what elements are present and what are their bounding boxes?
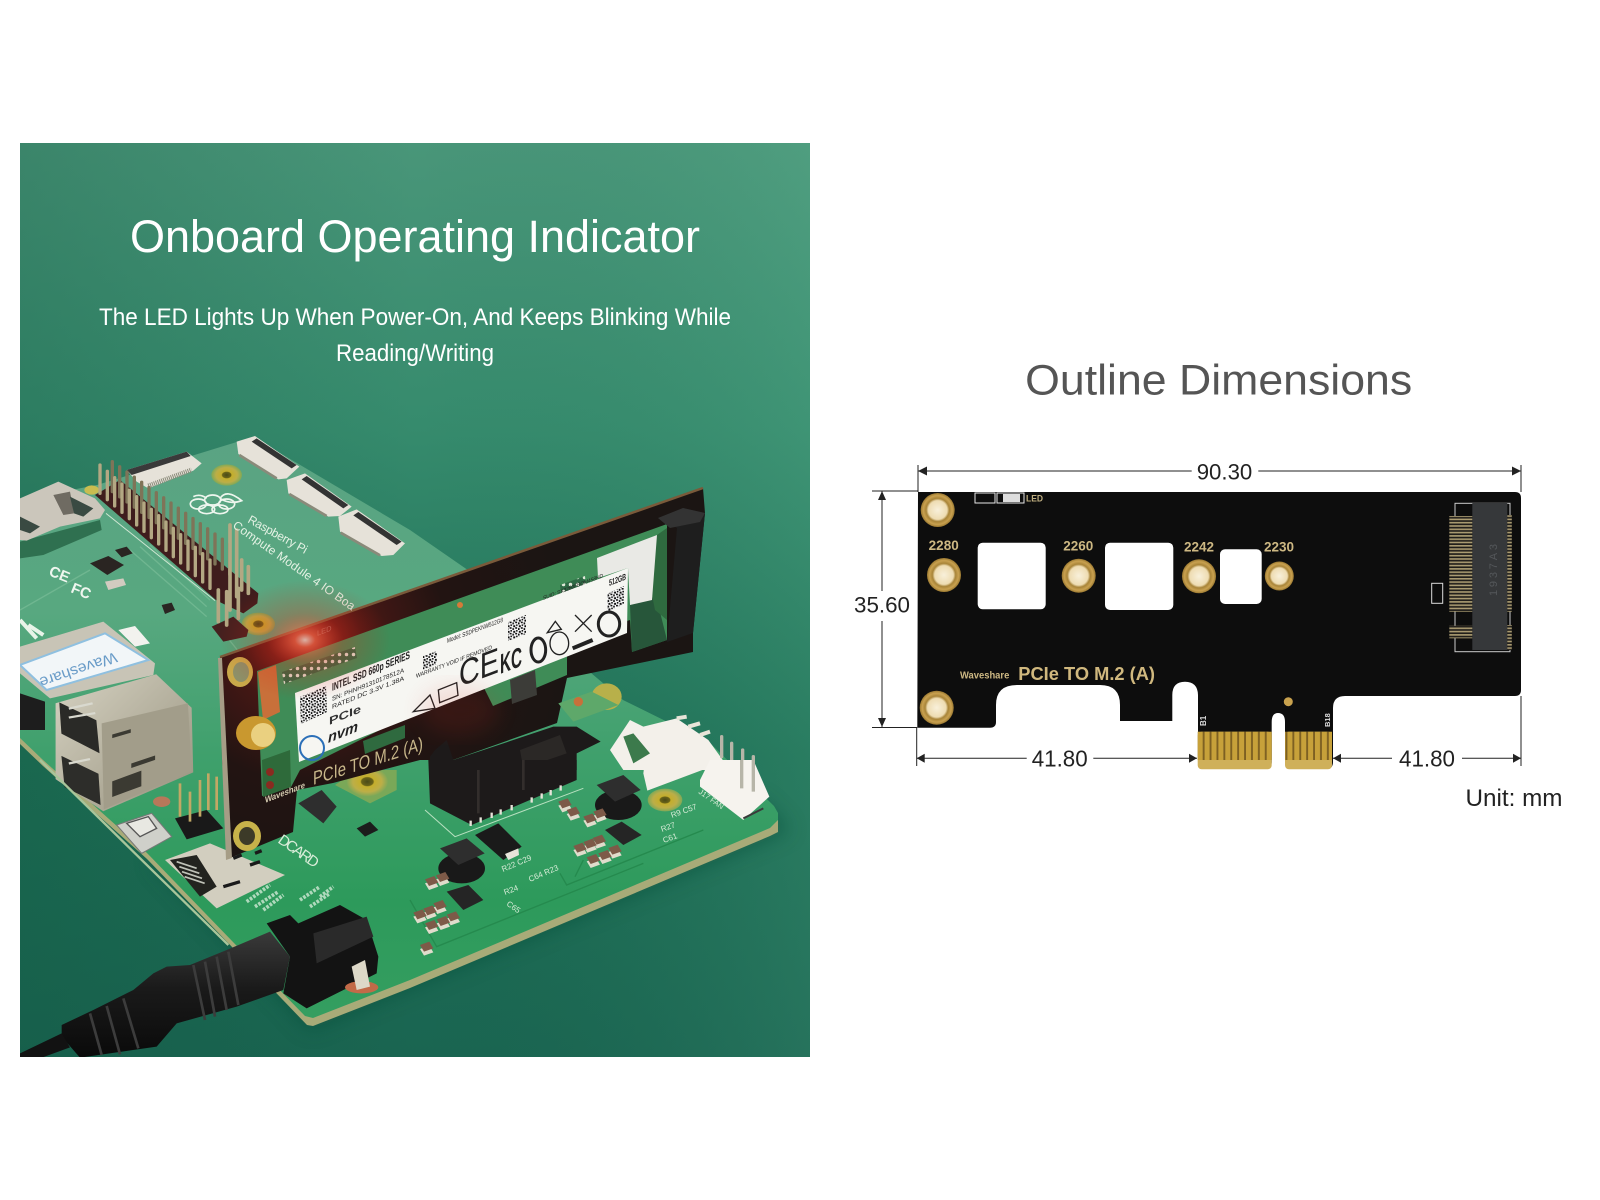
dimension: width 90.30: 90.30 (1197, 459, 1252, 484)
description text: The LED Lights Up When Power-On, And Keeps Blinking While (99, 304, 731, 331)
lower left board details (40, 760, 397, 945)
board traces (20, 544, 238, 650)
PCIe logo: PCIe (329, 704, 361, 728)
regulatory icons on label (413, 612, 620, 712)
silkscreen: R9 C57: R9 C57 (670, 802, 699, 820)
silkscreen: Compute Module: Compute Module 4 IO Boa (230, 518, 358, 613)
upper board details (20, 436, 405, 730)
slot pins (471, 785, 561, 826)
barrel jack (267, 905, 378, 1008)
card brand in photo: Waveshare (265, 780, 305, 805)
small sticker (118, 626, 150, 647)
hole size labels: 2260 (1063, 539, 1093, 554)
FFC connector top (127, 452, 202, 488)
black header with gold pins (175, 773, 223, 839)
SD slot (165, 843, 285, 908)
black chip component (298, 790, 337, 823)
mounting hole middle (242, 613, 275, 635)
ethernet block (20, 622, 155, 730)
orange pad (574, 697, 583, 706)
CE mark: CE (459, 639, 499, 695)
B1 marker: B1 (1199, 715, 1208, 726)
yellow pad by header (84, 485, 99, 495)
silkscreen: R27: R27 (660, 820, 677, 834)
PCIe slot (430, 727, 601, 770)
USB block (56, 674, 193, 811)
Intel logo (300, 736, 324, 760)
panel background (20, 143, 810, 1057)
Waveshare sticker text: Waveshare (37, 648, 119, 691)
FFC connector 2 (287, 473, 352, 517)
heading: outline dimensions: Outline Dimensions (1025, 356, 1412, 404)
lower right board details (410, 760, 769, 956)
crystal (105, 578, 126, 590)
label line rating: RATED DC 3.3V 1.38A (332, 675, 405, 711)
LED footprint (975, 493, 1024, 503)
front row pins (100, 465, 210, 588)
chips on board (90, 547, 175, 614)
silkscreen: FC: FC (69, 580, 94, 603)
silkscreen: R24: R24 (503, 883, 520, 897)
gold fingers (1198, 732, 1332, 769)
PCIe slot body (428, 760, 577, 825)
hole size labels (929, 538, 1294, 555)
label headline: INTEL SSD 660p SERIES (332, 650, 410, 694)
SSD label text (328, 572, 626, 747)
LED area marks (275, 629, 313, 651)
diode (475, 823, 522, 860)
description text (99, 304, 731, 367)
inductor right (595, 775, 642, 820)
white socket lower (643, 760, 707, 791)
dimension: 41.80 left: 41.80 (1032, 746, 1088, 772)
label line warranty: WARRANTY VOID IF REMOVED (416, 644, 492, 680)
dimension: height 35.60: 35.60 (854, 592, 910, 618)
dimension lines (872, 465, 1521, 766)
header edge highlight (106, 513, 215, 601)
card top edge (220, 488, 703, 657)
LED label: LED (1026, 494, 1043, 504)
M.2 black connector (658, 508, 705, 642)
green tab (558, 692, 618, 722)
mounting hole top (211, 464, 242, 486)
brass standoff (236, 716, 276, 750)
small component (1432, 583, 1443, 603)
board side edge (40, 760, 228, 945)
small SOT chip (357, 822, 378, 837)
SSD white label (295, 568, 628, 762)
micro USB (117, 813, 172, 853)
NVMe logo: nvm (328, 718, 358, 747)
hole size labels: 2280 (929, 538, 959, 553)
capacitor clusters (413, 798, 622, 956)
title: Onboard Operating Indicator (130, 211, 700, 262)
FFC connector 1 (237, 436, 299, 479)
silkscreen: FAN: J17 FAN (697, 787, 726, 811)
LED wide glow (220, 580, 390, 700)
SSD foil sticker (597, 535, 657, 605)
unit note: Unit: mm (1466, 785, 1562, 812)
silkscreen: C64 R23: C64 R23 (527, 863, 560, 884)
silkscreen: C65: C65 (505, 899, 522, 915)
power cable boot (62, 932, 290, 1058)
silkscreen: C61: C61 (662, 831, 679, 845)
label line firmware: SUID: SX3260FBOM458HD (543, 573, 603, 602)
PCB traces (410, 830, 703, 947)
QR codes (300, 586, 624, 724)
board name: PCIe TO M.2 (A) (1018, 663, 1155, 684)
silkscreen: SDCARD: DCARD (275, 831, 322, 872)
barrel-side white connector (430, 683, 753, 770)
mounting ring inner bottom (239, 827, 255, 845)
dimension drawing (854, 459, 1562, 812)
battery holder (20, 482, 105, 558)
short pin header (212, 525, 248, 642)
card text in photo: PCIe TO M.2 (A) (313, 733, 423, 790)
silkscreen hdmi stripes (20, 620, 43, 638)
SSD module (257, 524, 667, 797)
board brand: Waveshare (960, 669, 1009, 681)
silkscreen lines (247, 885, 333, 910)
card left edge (218, 658, 232, 860)
center mounting hole frame (335, 770, 397, 803)
window cutouts (978, 543, 1262, 610)
board drop shadow (320, 814, 785, 1024)
power cable (20, 1033, 70, 1058)
hole size labels: 2242 (1184, 539, 1214, 554)
hole size labels: 2230 (1264, 540, 1294, 555)
FFC connector 3 (338, 509, 405, 556)
micro USB opening (127, 817, 157, 837)
capacity: 512GB (609, 572, 626, 588)
inductor left (438, 838, 485, 883)
center mounting hole (347, 770, 388, 796)
fan connector pins (722, 737, 753, 770)
copper pad (153, 796, 170, 807)
IC right (605, 822, 642, 845)
barrel jack and cable (20, 905, 378, 1058)
label line serial: SN: PHNH91310178512A (332, 667, 404, 703)
mounting ring inner top (233, 662, 249, 682)
PCB board (917, 492, 1521, 769)
LED label on card: LED (317, 624, 332, 638)
IC left (447, 885, 483, 910)
adapter card PCB (220, 488, 705, 858)
dimension: 41.80 right: 41.80 (1399, 746, 1455, 772)
gold via dot (1284, 697, 1293, 706)
dimension arrowheads (878, 466, 1521, 763)
silkscreen: CE: CE (47, 563, 72, 587)
back row pins (112, 462, 230, 574)
mounting holes (920, 493, 1294, 725)
raspberry logo (190, 494, 242, 514)
mounting ring top (227, 657, 253, 687)
middle left ports (56, 674, 193, 811)
product photo: M.2 adapter on IO board (20, 436, 790, 1058)
IO board (20, 437, 778, 1026)
panel: onboard operating indicator (20, 143, 810, 1058)
B18 marker: B18 (1323, 713, 1332, 727)
label line model: Model: SSDPEKNW512G8 (447, 617, 503, 645)
fan connector (700, 760, 769, 820)
silkscreen: R22 C29: R22 C29 (500, 853, 533, 874)
M.2 slot (1449, 503, 1512, 652)
yellow mounting peek (592, 683, 622, 710)
description text: Reading/Writing (336, 340, 494, 367)
silkscreen: Raspberry Pi: Raspberry Pi (246, 512, 310, 557)
connector marking: 1937A3 (1488, 544, 1500, 596)
silk outline (425, 788, 583, 837)
fan connector pins lower (742, 760, 753, 792)
mounting ring bottom (233, 821, 261, 851)
KC mark: KC (500, 642, 522, 681)
white socket (610, 717, 730, 770)
long pin header base (95, 480, 258, 613)
lower red glow (420, 685, 500, 735)
mounting hole (648, 789, 682, 811)
